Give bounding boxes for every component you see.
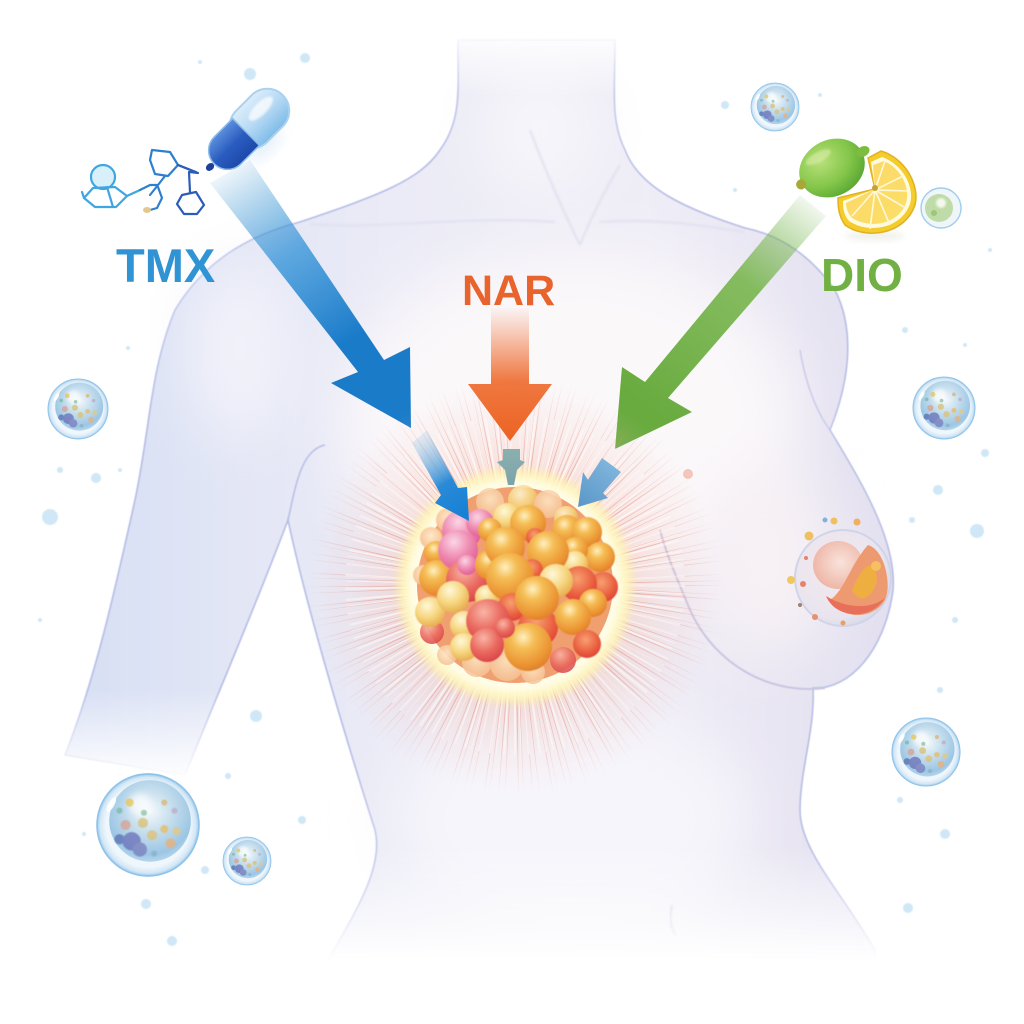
vesicle: top centre right bbox=[751, 83, 799, 131]
tumour cluster bbox=[393, 464, 637, 708]
tumour: main spheres bbox=[413, 503, 618, 671]
tumour: pale outer spheres bbox=[420, 485, 578, 684]
label: NAR: NAR bbox=[462, 267, 555, 315]
body silhouette bbox=[65, 40, 893, 975]
small arrow: blue bbox=[412, 430, 469, 521]
icon: citrus fruits bbox=[784, 124, 916, 241]
icon: capsule bbox=[199, 80, 298, 179]
vesicle: large lower left bbox=[97, 774, 199, 876]
secondary cell in breast bbox=[683, 469, 891, 626]
vesicle: right bbox=[913, 377, 975, 439]
molecule: left rings bbox=[82, 165, 140, 207]
molecule: right ring bbox=[177, 165, 204, 214]
radiating rays bbox=[365, 435, 665, 735]
glow around tumour bbox=[310, 380, 720, 790]
arrow: NAR orange bbox=[468, 308, 552, 441]
arrow: DIO green bbox=[615, 195, 826, 449]
small arrow: grey bbox=[497, 449, 525, 485]
label: TMX: TMX bbox=[116, 239, 215, 292]
vesicle: small lower left bbox=[223, 837, 271, 885]
label: DIO: DIO bbox=[821, 249, 903, 301]
molecule: middle rings bbox=[140, 150, 196, 210]
molecule structure bbox=[82, 150, 204, 214]
arrow: TMX blue bbox=[210, 160, 411, 428]
vesicle: lower right bbox=[892, 718, 960, 786]
vesicle: near citrus bbox=[921, 188, 961, 228]
small arrow: light blue bbox=[578, 458, 621, 507]
vesicle: left bbox=[48, 379, 108, 439]
